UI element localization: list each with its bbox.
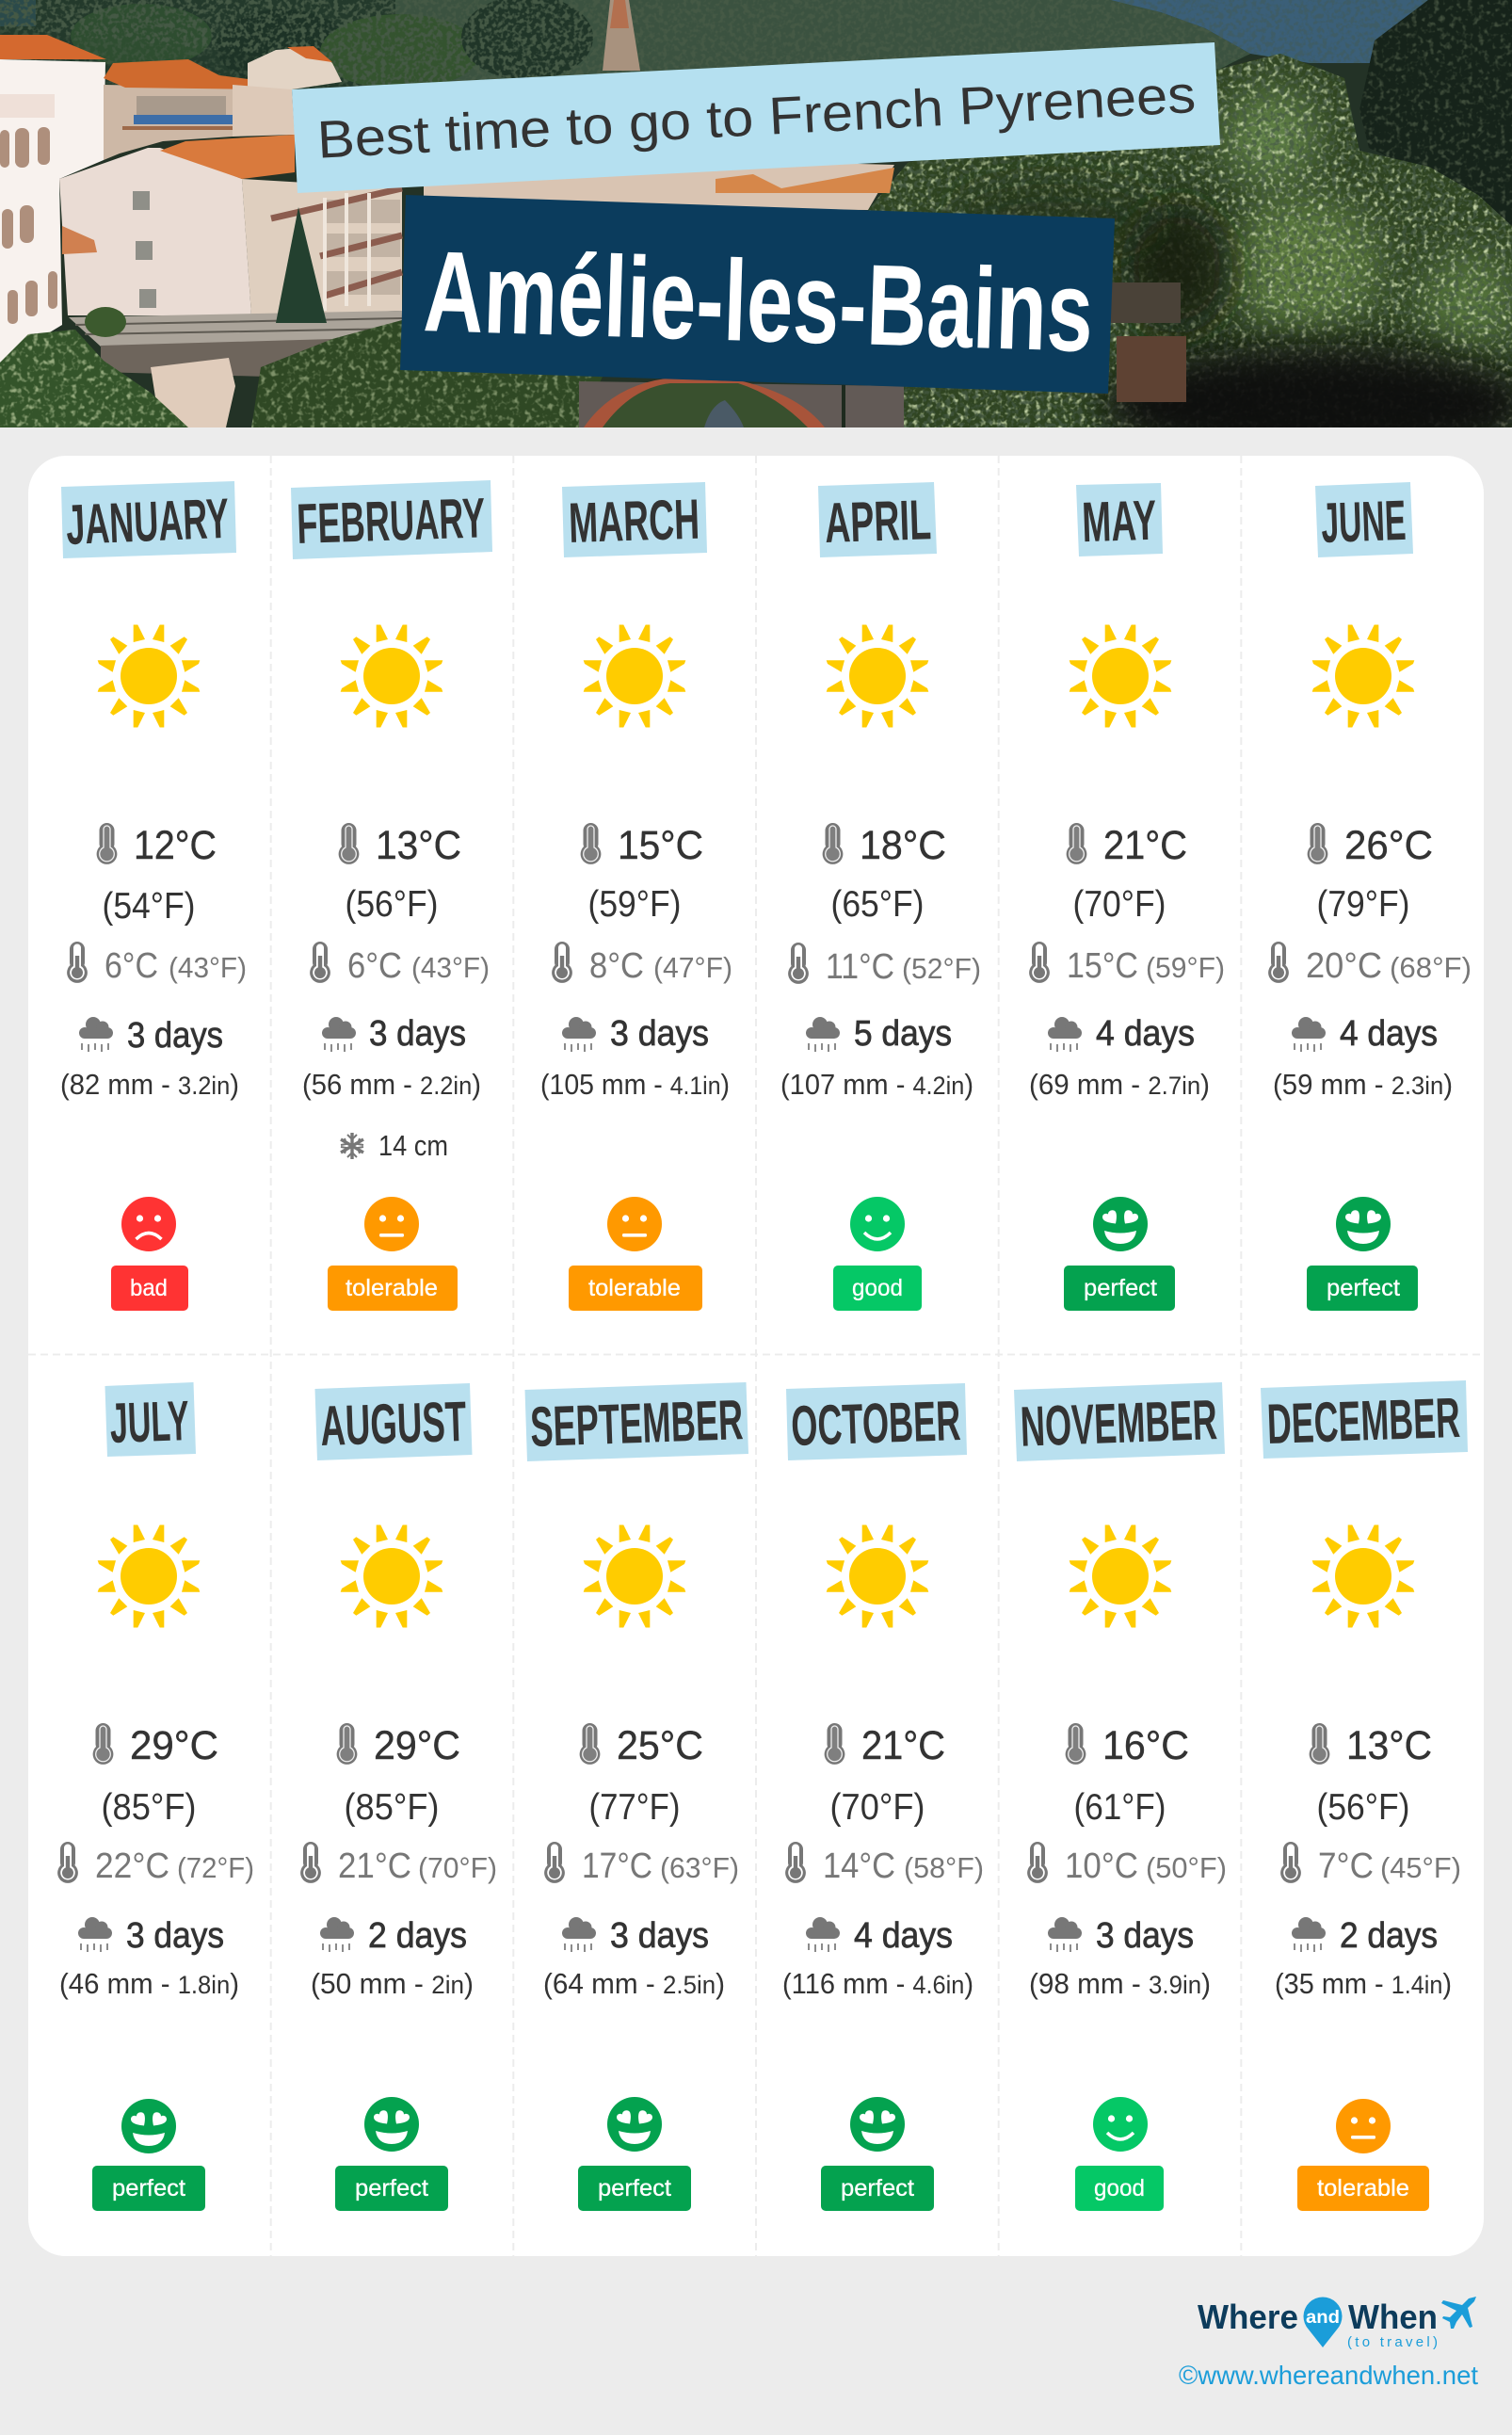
logo: Where and When (to travel): (to travel) <box>1347 2334 1438 2350</box>
icon: sun <box>584 625 685 727</box>
low temperature <box>1029 942 1225 986</box>
panel: December <box>1261 1380 1468 2211</box>
logo: Where and When (to travel): When <box>1348 2298 1438 2336</box>
month label: March <box>562 482 707 557</box>
month label: January: JANUARY <box>65 487 230 556</box>
month label: October <box>786 1383 967 1460</box>
high temperature <box>1067 823 1187 925</box>
high temperature: 18°C <box>860 823 946 868</box>
rainfall: (56 mm - 2.2in) <box>302 1068 481 1101</box>
low temperature: (63°F) <box>660 1851 739 1884</box>
high temperature: (85°F) <box>102 1787 196 1828</box>
month label: September: SEPTEMBER <box>529 1388 744 1459</box>
low temperature: 17°C <box>582 1846 652 1886</box>
high temperature <box>1310 1723 1432 1828</box>
low temperature: 14°C <box>823 1846 895 1886</box>
rainfall <box>311 1916 474 2000</box>
rainfall: (98 mm - 3.9in) <box>1029 1967 1211 2000</box>
rating: good: good <box>852 1275 903 1301</box>
high temperature <box>337 1723 460 1828</box>
high temperature <box>581 823 703 925</box>
month label: September <box>525 1382 748 1461</box>
low temperature <box>785 1842 984 1886</box>
rainfall: 4 days <box>1340 1014 1438 1054</box>
month label: June: JUNE <box>1320 489 1407 555</box>
rating: perfect <box>92 2099 205 2211</box>
low temperature: 11°C <box>826 947 894 987</box>
high temperature: (70°F) <box>830 1787 925 1828</box>
rainfall <box>540 1014 730 1101</box>
high temperature: 21°C <box>1103 823 1187 868</box>
rainfall: (82 mm - 3.2in) <box>60 1068 239 1101</box>
low temperature: (68°F) <box>1390 951 1472 984</box>
high temperature: (61°F) <box>1073 1787 1166 1828</box>
month label: February <box>291 480 492 559</box>
rainfall: 2 days <box>1340 1916 1438 1956</box>
low temperature <box>310 942 490 986</box>
high temperature <box>825 1723 945 1828</box>
rating: perfect <box>335 2097 448 2211</box>
rainfall: (50 mm - 2in) <box>311 1967 474 2000</box>
high temperature: 16°C <box>1102 1723 1189 1768</box>
icon: sun <box>1070 1525 1171 1627</box>
icon: sun <box>1312 1525 1414 1627</box>
panel: May <box>1029 483 1225 1311</box>
low temperature <box>1280 1842 1461 1886</box>
panel: November <box>1014 1382 1227 2211</box>
high temperature: 29°C <box>130 1723 218 1768</box>
rainfall <box>1273 1014 1453 1101</box>
high temperature: (85°F) <box>345 1787 439 1828</box>
icon: sun <box>1070 625 1171 727</box>
panel: October <box>782 1383 984 2211</box>
rainfall: 4 days <box>1096 1014 1195 1054</box>
rating: tolerable <box>328 1197 458 1311</box>
rating: perfect: perfect <box>598 2175 671 2201</box>
month label: April: APRIL <box>824 488 932 555</box>
low temperature <box>67 942 247 986</box>
high temperature: 25°C <box>617 1723 703 1768</box>
low temperature: 10°C <box>1065 1846 1138 1886</box>
icon: sun <box>341 1525 442 1627</box>
low temperature: 21°C <box>338 1846 411 1886</box>
website credit: ©www.whereandwhen.net <box>1179 2361 1478 2390</box>
month label: August <box>314 1383 473 1460</box>
month label: August: AUGUST <box>319 1390 467 1458</box>
icon: sun <box>827 1525 928 1627</box>
month label: January <box>61 481 236 558</box>
high temperature: (77°F) <box>589 1787 680 1828</box>
low temperature: (45°F) <box>1380 1851 1461 1884</box>
rainfall: 5 days <box>854 1014 952 1054</box>
month label: July <box>105 1382 196 1457</box>
low temperature: (59°F) <box>1146 951 1225 984</box>
rating: perfect: perfect <box>1327 1275 1400 1301</box>
month label: February: FEBRUARY <box>296 486 486 556</box>
rainfall <box>59 1916 239 2000</box>
rainfall <box>1029 1916 1211 2000</box>
rainfall: (59 mm - 2.3in) <box>1273 1068 1453 1101</box>
rating: tolerable: tolerable <box>588 1275 681 1301</box>
high temperature <box>580 1723 703 1828</box>
month label: May: MAY <box>1081 489 1157 554</box>
rating: good: good <box>1094 2175 1145 2201</box>
low temperature: (50°F) <box>1146 1851 1227 1884</box>
low temperature <box>1268 942 1472 986</box>
title banner: Best time to go to French Pyrenees: Best time to go to French Pyrenees <box>315 64 1197 169</box>
rating: perfect <box>1307 1197 1418 1311</box>
low temperature <box>57 1842 254 1886</box>
rainfall: 4 days <box>854 1916 953 1956</box>
rating: tolerable: tolerable <box>1317 2175 1409 2201</box>
low temperature: (43°F) <box>411 951 490 984</box>
month label: October: OCTOBER <box>790 1389 961 1458</box>
month label: November: NOVEMBER <box>1020 1388 1218 1459</box>
logo: Where and When (to travel): and <box>1306 2308 1340 2328</box>
icon: sun <box>1312 625 1414 727</box>
month label: May <box>1076 483 1163 556</box>
high temperature: 12°C <box>134 823 217 868</box>
rainfall <box>780 1014 973 1101</box>
rating: perfect: perfect <box>1084 1275 1157 1301</box>
high temperature: (56°F) <box>1316 1787 1410 1828</box>
low temperature: 15°C <box>1067 946 1138 986</box>
rainfall: 2 days <box>368 1916 467 1956</box>
rating: good <box>1075 2097 1164 2211</box>
rating: perfect: perfect <box>112 2175 185 2201</box>
rainfall: (107 mm - 4.2in) <box>780 1068 973 1101</box>
low temperature: 22°C <box>95 1846 169 1886</box>
rainfall: (105 mm - 4.1in) <box>540 1068 730 1101</box>
rainfall: (35 mm - 1.4in) <box>1275 1967 1452 2000</box>
rating: tolerable <box>569 1197 702 1311</box>
high temperature <box>93 1723 218 1828</box>
high temperature: 13°C <box>1346 1723 1432 1768</box>
panel: January <box>60 481 247 1311</box>
rainfall <box>782 1916 973 2000</box>
panel: February <box>291 480 492 1311</box>
low temperature <box>300 1842 497 1886</box>
rainfall: (116 mm - 4.6in) <box>782 1967 973 2000</box>
low temperature: 7°C <box>1318 1846 1374 1886</box>
logo: Where and When (to travel): Where <box>1198 2298 1298 2336</box>
rainfall: 3 days <box>369 1014 466 1054</box>
month label: April <box>818 482 937 557</box>
rating: perfect <box>578 2097 691 2211</box>
icon: sun <box>341 625 442 727</box>
title banner: Amélie-les-Bains: Amélie-les-Bains <box>422 227 1095 376</box>
panel: September <box>525 1382 748 2211</box>
low temperature: 20°C <box>1306 946 1382 986</box>
rainfall: 3 days <box>126 1916 224 1956</box>
low temperature <box>544 1842 739 1886</box>
icon: sun <box>98 1525 200 1627</box>
high temperature: (56°F) <box>345 884 439 925</box>
low temperature: 6°C <box>347 946 402 986</box>
low temperature: (72°F) <box>177 1851 254 1884</box>
icon: sun <box>827 625 928 727</box>
panel: July <box>57 1382 254 2211</box>
rainfall: (46 mm - 1.8in) <box>59 1967 239 2000</box>
title banner: Amélie-les-Bains <box>400 195 1115 394</box>
low temperature: (58°F) <box>904 1851 984 1884</box>
low temperature <box>1027 1842 1227 1886</box>
high temperature: 21°C <box>861 1723 945 1768</box>
low temperature: 6°C <box>105 946 158 986</box>
rainfall: 3 days <box>127 1016 223 1056</box>
high temperature <box>97 823 217 927</box>
low temperature: (47°F) <box>653 951 732 984</box>
low temperature <box>788 943 981 987</box>
high temperature: (79°F) <box>1316 884 1410 925</box>
high temperature: 15°C <box>618 823 703 868</box>
rating: perfect: perfect <box>355 2175 428 2201</box>
icon: sun <box>98 625 200 727</box>
rainfall: (64 mm - 2.5in) <box>543 1967 725 2000</box>
high temperature: (65°F) <box>830 884 925 925</box>
high temperature: (59°F) <box>587 884 682 925</box>
rainfall <box>543 1916 725 2000</box>
low temperature <box>552 942 732 986</box>
rating: perfect: perfect <box>841 2175 914 2201</box>
title banner: Best time to go to French Pyrenees <box>292 42 1220 193</box>
month label: November <box>1014 1382 1225 1461</box>
high temperature <box>1066 1723 1189 1828</box>
icon: sun <box>584 1525 685 1627</box>
high temperature <box>823 823 946 925</box>
low temperature: (70°F) <box>418 1851 497 1884</box>
low temperature: (52°F) <box>902 952 981 985</box>
high temperature: 29°C <box>374 1723 460 1768</box>
rating: perfect <box>1064 1197 1175 1311</box>
rainfall: (69 mm - 2.7in) <box>1029 1068 1210 1101</box>
panel: June <box>1268 482 1472 1311</box>
rating: good <box>833 1197 922 1311</box>
panel: April <box>780 482 981 1311</box>
rainfall <box>1275 1916 1452 2000</box>
rainfall: 3 days <box>610 1916 709 1956</box>
rainfall: 3 days <box>610 1014 709 1054</box>
high temperature <box>1308 823 1433 925</box>
low temperature: (43°F) <box>169 951 247 984</box>
rainfall <box>1029 1014 1210 1101</box>
rainfall <box>302 1014 481 1101</box>
rating: perfect <box>821 2097 934 2211</box>
high temperature: (54°F) <box>102 886 196 927</box>
logo: Where and When (to travel) <box>1198 2297 1476 2350</box>
panel: August <box>300 1383 497 2211</box>
rating: bad: bad <box>130 1275 168 1301</box>
month label: June <box>1315 482 1413 557</box>
rainfall <box>60 1016 239 1101</box>
high temperature: 13°C <box>376 823 461 868</box>
low temperature: 8°C <box>589 946 644 986</box>
snowfall: 14 cm <box>378 1129 448 1162</box>
high temperature: (70°F) <box>1073 884 1166 925</box>
high temperature: 26°C <box>1344 823 1433 868</box>
rating: tolerable <box>1297 2099 1429 2211</box>
month label: March: MARCH <box>568 488 700 555</box>
month label: July: JULY <box>109 1389 190 1455</box>
snowfall <box>341 1129 448 1162</box>
panel: March <box>540 482 732 1311</box>
rating: bad <box>111 1197 188 1311</box>
rainfall: 3 days <box>1096 1916 1194 1956</box>
header photo: Amélie-les-Bains town view <box>0 0 1512 466</box>
rating: tolerable: tolerable <box>346 1275 438 1301</box>
calendar panel background <box>28 456 1484 2256</box>
high temperature <box>339 823 461 925</box>
